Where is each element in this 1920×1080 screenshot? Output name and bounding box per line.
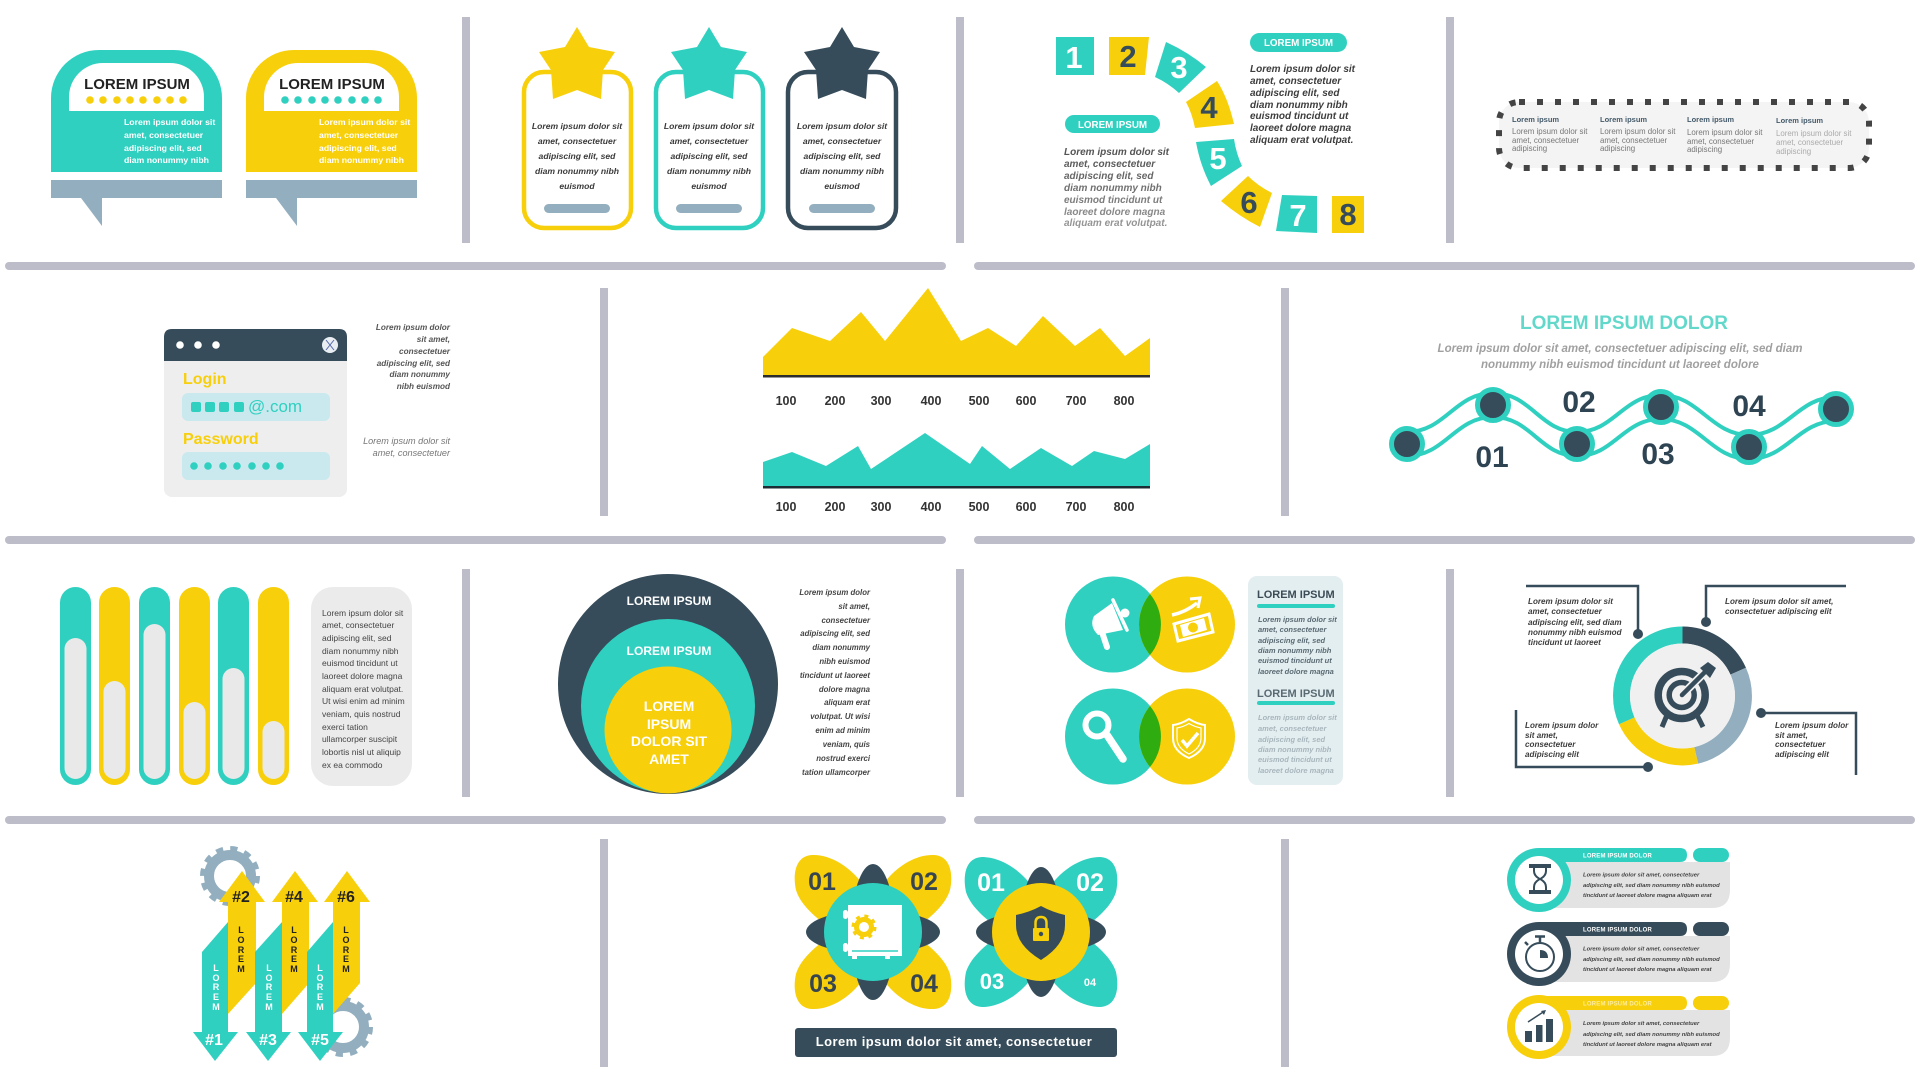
item: stopwatch: tincidunt ut laoreet dolore magna aliquam erat xyxy=(1583,967,1713,973)
star card: teal: Lorem ipsum dolor sit xyxy=(664,121,755,131)
sidebar: laoreet dolore magna xyxy=(1258,667,1334,676)
sidebar: LOREM IPSUM xyxy=(1257,589,1335,601)
star card: yellow xyxy=(524,27,631,228)
step 4 xyxy=(1186,81,1234,128)
chart: yellow area: 400 xyxy=(921,394,941,408)
item: hourglass: LOREM IPSUM DOLOR xyxy=(1583,854,1653,860)
text box: euismod tincidunt ut xyxy=(322,658,398,668)
text box: adipiscing elit, sed xyxy=(322,633,392,643)
step 8: 8 xyxy=(1339,197,1357,232)
arrows: M xyxy=(316,1002,324,1012)
text box: laoreet dolore magna xyxy=(322,671,403,681)
wave numbers: 02 xyxy=(1562,386,1596,419)
bubble: yellow: amet, consectetuer xyxy=(319,130,399,140)
arrows: E xyxy=(343,954,349,964)
arrows: #1 xyxy=(205,1032,223,1049)
item: bar chart: LOREM IPSUM DOLOR xyxy=(1583,1002,1653,1008)
icon: hourglass xyxy=(1529,864,1551,894)
sidebar: amet, consectetuer xyxy=(1258,724,1327,733)
flower: shield: 04 xyxy=(1084,977,1097,989)
step 3 xyxy=(1155,42,1206,93)
bubble: yellow: diam nonummy nibh xyxy=(319,155,404,165)
star card: yellow: diam nonummy nibh xyxy=(535,166,619,176)
column 3: amet, consectetuer xyxy=(1687,137,1754,146)
arrows: O xyxy=(265,973,273,983)
description: Lorem ipsum dolor sit amet, consectetuer adipiscing elit, sed diam xyxy=(1438,343,1802,355)
step 1 xyxy=(1056,37,1094,75)
text: left description: Lorem ipsum dolor sit xyxy=(1064,147,1170,158)
text: side note: diam nonummy xyxy=(812,643,871,652)
flower: safe: 03 xyxy=(809,970,837,998)
star card: teal xyxy=(656,27,763,228)
text: right description: Lorem ipsum dolor sit xyxy=(1250,64,1356,75)
arrows: R xyxy=(317,982,324,992)
bubble: teal: diam nonummy nibh xyxy=(124,155,209,165)
caption bar: Lorem ipsum dolor sit amet, consectetuer xyxy=(816,1034,1092,1049)
caption bar xyxy=(795,1028,1117,1057)
text: side note: sit amet, xyxy=(838,602,870,611)
text: bottom left: adipiscing elit xyxy=(1525,750,1579,759)
wave numbers: 04 xyxy=(1732,390,1766,423)
flower: safe xyxy=(795,855,951,1009)
column 4: adipiscing xyxy=(1776,147,1811,156)
text: top left: amet, consectetuer xyxy=(1528,607,1603,616)
label: left pill: LOREM IPSUM xyxy=(1078,120,1147,131)
panel: target donut xyxy=(1516,586,1856,775)
arrows: L xyxy=(213,963,219,973)
item: hourglass: Lorem ipsum dolor sit amet, consectetuer xyxy=(1583,872,1700,878)
text: top right: Lorem ipsum dolor sit amet, xyxy=(1725,597,1833,606)
step 2 xyxy=(1109,37,1149,75)
arrows: O xyxy=(342,935,350,945)
text: bottom left: sit amet, xyxy=(1525,731,1558,740)
text: right description: euismod tincidunt ut xyxy=(1250,111,1349,122)
sidebar: adipiscing elit, sed xyxy=(1258,735,1326,744)
chart: teal area xyxy=(763,433,1150,514)
window: Password xyxy=(183,431,259,448)
step 3: 3 xyxy=(1170,50,1188,85)
arrows: E xyxy=(266,992,272,1002)
wave ribbon xyxy=(1407,393,1836,459)
arrows: M xyxy=(342,964,350,974)
item: bar chart: adipiscing elit, sed diam nonummy nibh euismod xyxy=(1583,1032,1720,1038)
sidebar: euismod tincidunt ut xyxy=(1258,656,1332,665)
arrows: M xyxy=(265,1002,273,1012)
text: top left: tincidunt ut laoreet xyxy=(1528,638,1601,647)
column 2 xyxy=(1600,115,1676,153)
text: left description: diam nonummy nibh xyxy=(1064,183,1162,194)
flower: shield: 01 xyxy=(977,869,1005,897)
sidebar: euismod tincidunt ut xyxy=(1258,755,1332,764)
wave numbers: 01 xyxy=(1475,441,1509,474)
star card: dark: Lorem ipsum dolor sit xyxy=(797,121,888,131)
panel: arrows and gears xyxy=(193,849,370,1061)
flower: shield xyxy=(965,857,1117,1007)
bubble: yellow: LOREM IPSUM xyxy=(279,76,385,93)
icon: money xyxy=(1172,598,1213,641)
chart: teal area: 400 xyxy=(921,500,941,514)
window: @.com xyxy=(248,397,302,416)
arrows: #3 xyxy=(259,1032,277,1049)
text: right description: diam nonummy nibh xyxy=(1250,100,1348,111)
label: right pill xyxy=(1250,33,1347,52)
text box: ullamcorper suscipit xyxy=(322,734,398,744)
step 5 xyxy=(1196,139,1242,186)
icon: safe xyxy=(843,905,902,959)
icon: magnifier xyxy=(1086,714,1123,759)
item: hourglass xyxy=(1507,848,1730,912)
step 8 xyxy=(1332,196,1364,233)
text: right description: aliquam erat volutpat. xyxy=(1250,135,1353,146)
bubble: yellow: adipiscing elit, sed xyxy=(319,143,397,153)
circle labels: LOREM xyxy=(644,698,694,714)
column 4 xyxy=(1776,116,1852,156)
text box: exerci tation xyxy=(322,722,368,732)
sidebar: Lorem ipsum dolor sit xyxy=(1258,615,1337,624)
text box: Lorem ipsum dolor sit xyxy=(322,608,404,618)
flower: safe: 01 xyxy=(808,868,836,896)
circle labels: DOLOR SIT xyxy=(631,733,708,749)
arrows: O xyxy=(290,935,298,945)
step 2: 2 xyxy=(1119,39,1137,74)
text: side note: aliquam erat xyxy=(824,698,870,707)
window: Login xyxy=(183,371,227,388)
chart: teal area: 600 xyxy=(1016,500,1036,514)
inner circle xyxy=(604,666,732,794)
column 3: Lorem ipsum dolor sit xyxy=(1687,128,1763,137)
text: login note: diam nonummy xyxy=(389,370,450,379)
chart: yellow area: 100 xyxy=(776,394,796,408)
bars xyxy=(60,587,289,785)
donut chart xyxy=(1622,635,1743,757)
text: top right: consectetuer adipiscing elit xyxy=(1725,607,1832,616)
text box xyxy=(311,587,412,786)
chart: teal area: 300 xyxy=(871,500,891,514)
chart: yellow area: 300 xyxy=(871,394,891,408)
sidebar: Lorem ipsum dolor sit xyxy=(1258,713,1337,722)
wave nodes xyxy=(1392,390,1852,462)
venn: magnifier and shield xyxy=(1065,688,1235,784)
chart: yellow area: 200 xyxy=(825,394,845,408)
item: hourglass: adipiscing elit, sed diam nonummy nibh euismod xyxy=(1583,883,1720,889)
panel: login window xyxy=(164,323,451,497)
column 1: adipiscing xyxy=(1512,144,1547,153)
flower: shield: 02 xyxy=(1076,869,1104,897)
circle labels xyxy=(627,594,711,767)
text: left description: adipiscing elit, sed xyxy=(1064,171,1154,182)
panel: star cards xyxy=(524,27,896,228)
arrows: R xyxy=(291,945,298,955)
text: left description: aliquam erat volutpat. xyxy=(1064,218,1167,229)
arrows: M xyxy=(237,964,245,974)
chart: yellow area: 500 xyxy=(969,394,989,408)
column 1: amet, consectetuer xyxy=(1512,136,1579,145)
icon: megaphone xyxy=(1092,600,1130,647)
panel: icon list xyxy=(1507,848,1730,1059)
icon: growth bars xyxy=(1525,1010,1553,1042)
arrows: L xyxy=(343,925,349,935)
column 3: adipiscing xyxy=(1687,145,1722,154)
bubble: teal: adipiscing elit, sed xyxy=(124,143,202,153)
item: stopwatch xyxy=(1507,922,1730,986)
sidebar: laoreet dolore magna xyxy=(1258,766,1334,775)
outer circle xyxy=(558,574,778,794)
text box: amet, consectetuer xyxy=(322,620,394,630)
circle labels: AMET xyxy=(649,751,689,767)
column 2: Lorem ipsum xyxy=(1600,115,1647,124)
chart: teal area: 700 xyxy=(1066,500,1086,514)
arrows xyxy=(193,871,370,1061)
arrows: E xyxy=(317,992,323,1002)
item: hourglass: tincidunt ut laoreet dolore magna aliquam erat xyxy=(1583,893,1713,899)
icon: top gear xyxy=(203,849,257,903)
text: right description: amet, consectetuer xyxy=(1250,76,1342,87)
wave numbers xyxy=(1475,386,1766,474)
step 7 xyxy=(1276,195,1317,233)
star card: dark: amet, consectetuer xyxy=(803,136,882,146)
chart: yellow area: 700 xyxy=(1066,394,1086,408)
panel: speech bubbles xyxy=(51,50,417,226)
arrows: R xyxy=(213,982,220,992)
sidebar: adipiscing elit, sed xyxy=(1258,636,1326,645)
arrows: O xyxy=(316,973,324,983)
text: side note: consectetuer xyxy=(821,616,871,625)
flower: safe: 02 xyxy=(910,868,938,896)
text: left description: laoreet dolore magna xyxy=(1064,207,1166,218)
bubble: teal xyxy=(51,50,222,226)
star card: dark: euismod xyxy=(824,181,860,191)
text: right description: adipiscing elit, sed xyxy=(1250,88,1340,99)
label: right pill: LOREM IPSUM xyxy=(1264,38,1333,49)
bubble: yellow: Lorem ipsum dolor sit xyxy=(319,117,410,127)
panel: venn icons xyxy=(1065,576,1343,785)
item: bar chart: tincidunt ut laoreet dolore magna aliquam erat xyxy=(1583,1042,1713,1048)
star card: teal: adipiscing elit, sed xyxy=(671,151,748,161)
text: login note: adipiscing elit, sed xyxy=(377,359,451,368)
text: bottom right: Lorem ipsum dolor xyxy=(1775,721,1849,730)
arrows: O xyxy=(237,935,245,945)
arrows: E xyxy=(213,992,219,1002)
column 3: Lorem ipsum xyxy=(1687,115,1734,124)
star card: yellow: euismod xyxy=(559,181,595,191)
text: bottom left: Lorem ipsum dolor xyxy=(1525,721,1599,730)
text box: diam nonummy nibh xyxy=(322,646,399,656)
chart: yellow area xyxy=(763,288,1150,408)
column 4: Lorem ipsum xyxy=(1776,116,1823,125)
circle labels: LOREM IPSUM xyxy=(627,594,711,608)
bubble: yellow xyxy=(246,50,417,226)
heading: LOREM IPSUM DOLOR xyxy=(1520,313,1728,334)
circle labels: IPSUM xyxy=(647,716,691,732)
text: side note: tation ullamcorper xyxy=(802,768,871,777)
panel: dotted text box xyxy=(1499,102,1869,168)
description: nonummy nibh euismod tincidunt ut laoreet dolore xyxy=(1481,359,1760,371)
chart: yellow area: 800 xyxy=(1114,394,1134,408)
text box: aliquam erat volutpat. xyxy=(322,684,403,694)
text: login note: consectetuer xyxy=(399,347,451,356)
step 1: 1 xyxy=(1065,40,1083,75)
text: left description: amet, consectetuer xyxy=(1064,159,1156,170)
step 5: 5 xyxy=(1209,141,1227,176)
text: right description: laoreet dolore magna xyxy=(1250,123,1352,134)
arrows: R xyxy=(238,945,245,955)
connectors xyxy=(1516,586,1856,775)
star card: teal: amet, consectetuer xyxy=(670,136,749,146)
bubble: teal: LOREM IPSUM xyxy=(84,76,190,93)
window xyxy=(164,329,347,497)
item: stopwatch: LOREM IPSUM DOLOR xyxy=(1583,928,1653,934)
text: side note: volutpat. Ut wisi xyxy=(810,712,871,721)
arrows: L xyxy=(317,963,323,973)
text: left description: euismod tincidunt ut xyxy=(1064,195,1163,206)
venn: megaphone and money xyxy=(1065,576,1235,672)
icon: shield check xyxy=(1173,719,1205,758)
step 7: 7 xyxy=(1289,198,1307,233)
item: stopwatch: Lorem ipsum dolor sit amet, consectetuer xyxy=(1583,946,1700,952)
star card: dark xyxy=(788,27,896,228)
arrows: #2 xyxy=(232,889,250,906)
item: stopwatch: adipiscing elit, sed diam nonummy nibh euismod xyxy=(1583,957,1720,963)
text: password note: amet, consectetuer xyxy=(373,448,451,458)
icon: bottom gear xyxy=(316,1000,370,1054)
arrows: R xyxy=(266,982,273,992)
arrows: R xyxy=(343,945,350,955)
star card: yellow: Lorem ipsum dolor sit xyxy=(532,121,623,131)
icon: target xyxy=(1658,662,1716,727)
sidebar: LOREM IPSUM xyxy=(1257,688,1335,700)
arrows: L xyxy=(266,963,272,973)
column 3 xyxy=(1687,115,1763,154)
sidebar: diam nonummy nibh xyxy=(1258,745,1332,754)
panel: capsule bars xyxy=(60,587,412,786)
column 1: Lorem ipsum dolor sit xyxy=(1512,127,1588,136)
column 4: Lorem ipsum dolor sit xyxy=(1776,129,1852,138)
chart: teal area: 800 xyxy=(1114,500,1134,514)
panel: nested circles xyxy=(558,574,871,794)
item: bar chart xyxy=(1507,995,1730,1059)
star card: yellow: amet, consectetuer xyxy=(538,136,617,146)
sidebar: amet, consectetuer xyxy=(1258,625,1327,634)
panel: numbered arc xyxy=(1056,33,1364,233)
star card: teal: euismod xyxy=(691,181,727,191)
panel: wave timeline xyxy=(1392,313,1852,474)
text box: lobortis nisl ut aliquip xyxy=(322,747,401,757)
star card: yellow: adipiscing elit, sed xyxy=(539,151,616,161)
step 4: 4 xyxy=(1200,90,1218,125)
text box: ex ea commodo xyxy=(322,760,383,770)
wave numbers: 03 xyxy=(1641,438,1675,471)
column 2: adipiscing xyxy=(1600,144,1635,153)
star card: teal: diam nonummy nibh xyxy=(667,166,751,176)
text: side note: adipiscing elit, sed xyxy=(800,629,870,638)
text: side note: tincidunt ut laoreet xyxy=(800,671,870,680)
text: top left: Lorem ipsum dolor sit xyxy=(1528,597,1613,606)
bubble: teal: amet, consectetuer xyxy=(124,130,204,140)
star card: dark: adipiscing elit, sed xyxy=(804,151,881,161)
text: side note: enim ad minim xyxy=(815,726,870,735)
text: bottom right: consectetuer xyxy=(1775,740,1826,749)
text: password note: Lorem ipsum dolor sit xyxy=(363,436,450,446)
chart: teal area: 200 xyxy=(825,500,845,514)
text: side note: veniam, quis xyxy=(823,740,871,749)
column 4: amet, consectetuer xyxy=(1776,138,1843,147)
sidebar xyxy=(1248,576,1343,785)
arrows: E xyxy=(238,954,244,964)
chart: teal area: 100 xyxy=(776,500,796,514)
step 6 xyxy=(1221,176,1272,227)
arrows: E xyxy=(291,954,297,964)
text: top left: nonummy nibh euismod xyxy=(1528,628,1623,637)
text: side note: Lorem ipsum dolor xyxy=(799,588,871,597)
text: side note: nostrud exerci xyxy=(816,754,871,763)
step 6: 6 xyxy=(1240,185,1258,220)
arrows: L xyxy=(291,925,297,935)
text: bottom right: sit amet, xyxy=(1775,731,1808,740)
text: top left: adipiscing elit, sed diam xyxy=(1528,618,1622,627)
chart: teal area: 500 xyxy=(969,500,989,514)
text: bottom right: adipiscing elit xyxy=(1775,750,1829,759)
text box: Ut wisi enim ad minim xyxy=(322,696,405,706)
arrows: #5 xyxy=(311,1032,329,1049)
icon: shield lock xyxy=(1016,906,1065,960)
flower: shield: 03 xyxy=(980,969,1004,994)
text: login note: nibh euismod xyxy=(397,382,451,391)
item: bar chart: Lorem ipsum dolor sit amet, consectetuer xyxy=(1583,1021,1700,1027)
column 1: Lorem ipsum xyxy=(1512,115,1559,124)
arrows: #6 xyxy=(337,889,355,906)
arrows: L xyxy=(238,925,244,935)
arrows: M xyxy=(290,964,298,974)
middle circle xyxy=(581,619,755,793)
bubble: teal: Lorem ipsum dolor sit xyxy=(124,117,215,127)
text: side note: nibh euismod xyxy=(819,657,870,666)
flower: safe: 04 xyxy=(910,970,938,998)
circle labels: LOREM IPSUM xyxy=(627,644,711,658)
column 2: amet, consectetuer xyxy=(1600,136,1667,145)
arrows: M xyxy=(212,1002,220,1012)
panel: flowers xyxy=(795,855,1117,1057)
column 2: Lorem ipsum dolor sit xyxy=(1600,127,1676,136)
text: login note: Lorem ipsum dolor xyxy=(376,323,451,332)
label: left pill xyxy=(1065,115,1160,133)
arrows: O xyxy=(212,973,220,983)
column 1 xyxy=(1512,115,1588,153)
arrows: #4 xyxy=(285,889,303,906)
sidebar: diam nonummy nibh xyxy=(1258,646,1332,655)
text box: veniam, quis nostrud xyxy=(322,709,401,719)
chart: yellow area: 600 xyxy=(1016,394,1036,408)
icon: stopwatch xyxy=(1525,936,1554,971)
text: side note: dolore magna xyxy=(819,685,871,694)
text: login note: sit amet, xyxy=(417,335,450,344)
star card: dark: diam nonummy nibh xyxy=(800,166,884,176)
text: bottom left: consectetuer xyxy=(1525,740,1576,749)
